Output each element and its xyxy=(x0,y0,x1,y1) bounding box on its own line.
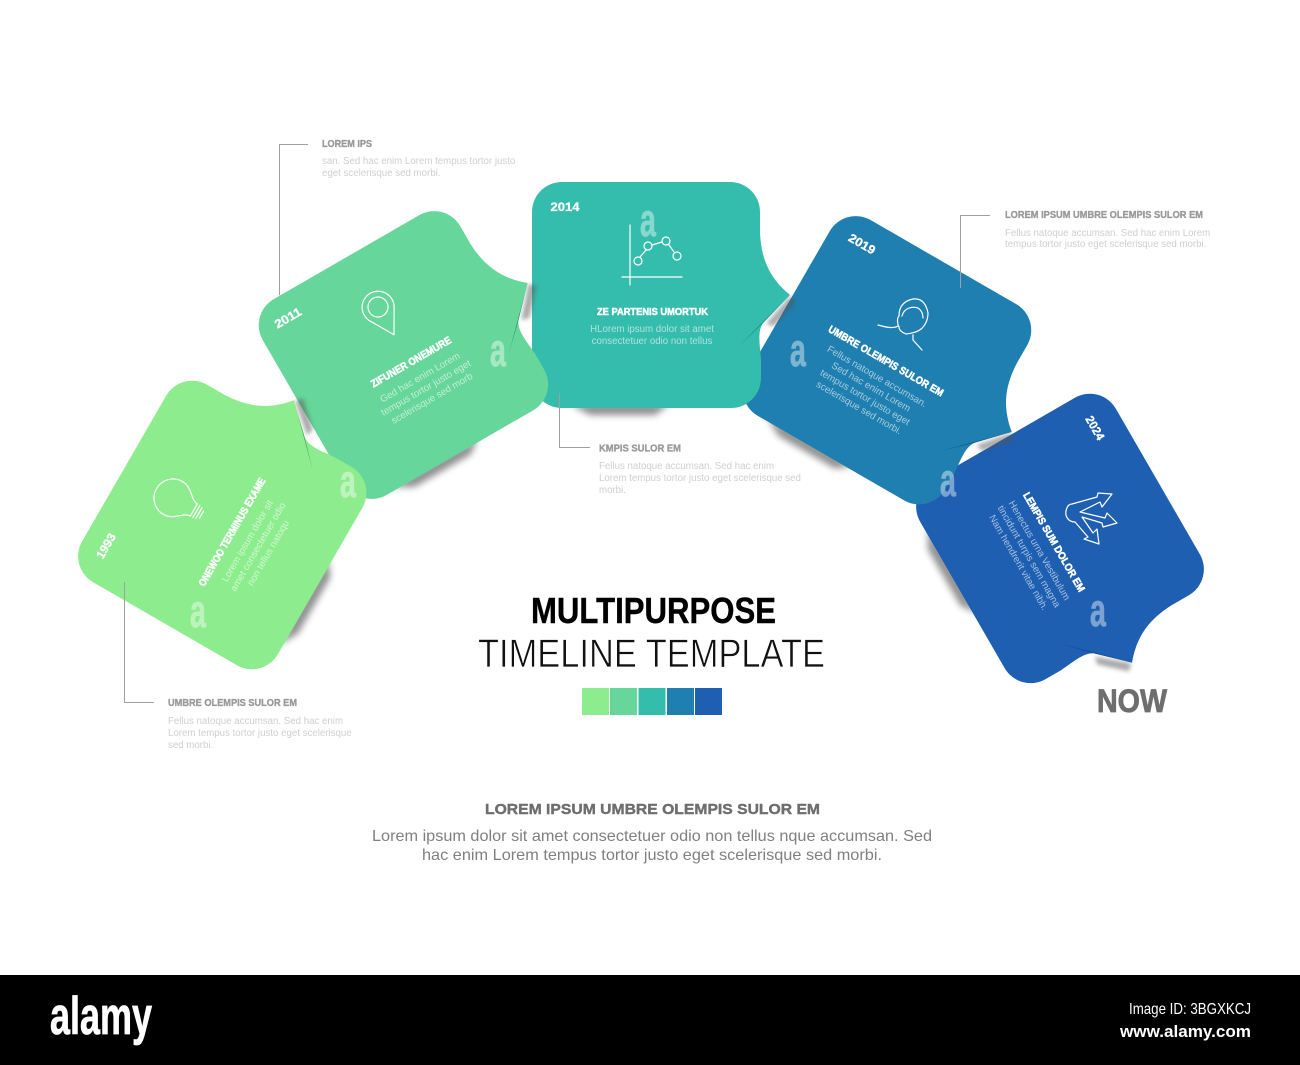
watermark letters: a xyxy=(340,456,356,508)
footer bar: Image ID: 3BGXKCJ xyxy=(1129,1001,1251,1018)
callout: 2014: KMPIS SULOR EM xyxy=(599,444,681,454)
callout: 2019 xyxy=(960,210,1210,288)
watermark letters: a xyxy=(190,586,206,638)
title: MULTIPURPOSE xyxy=(531,590,776,631)
footer bar: www.alamy.com xyxy=(1119,1022,1251,1041)
icon: line chart xyxy=(622,225,682,285)
watermark letters: a xyxy=(940,455,956,507)
footer bar xyxy=(0,975,1300,1065)
card text 2014: consectetuer odio non tellus xyxy=(592,336,712,347)
callout: 1993 xyxy=(124,582,352,751)
card text 2019: tempus tortor justo eget xyxy=(818,368,912,428)
panel: 2024 card xyxy=(899,383,1233,728)
bottom text block: LOREM IPSUM UMBRE OLEMPIS SULOR EM xyxy=(485,801,820,818)
card text 2019: UMBRE OLEMPIS SULOR EM xyxy=(826,323,946,399)
callout: 2011: LOREM IPS xyxy=(322,139,372,150)
card text 2011: tempus tortor justo eget xyxy=(379,358,473,419)
callout: 2014: morbi. xyxy=(599,485,626,496)
icon: map pin xyxy=(356,285,408,343)
callout: 2014: Fellus natoque accumsan. Sed hac enim xyxy=(599,461,774,472)
callout: 2019: LOREM IPSUM UMBRE OLEMPIS SULOR EM xyxy=(1005,210,1203,221)
year 2024: 2024 xyxy=(1082,413,1108,443)
callout: 2014 xyxy=(560,393,801,496)
card text 2024: Nam hendrerit vitae nibh. xyxy=(986,513,1050,612)
card text 2024: tincidunt turpis sem magna xyxy=(995,504,1062,610)
callout: 2019: Fellus natoque accumsan. Sed hac enim Lorem xyxy=(1005,228,1210,239)
card text 1993: amet consectetuer odio xyxy=(228,501,288,594)
title xyxy=(478,590,825,676)
card text 2011: Ged hac enim Lorem xyxy=(378,351,462,405)
callout: 2014: Lorem tempus tortor justo eget scelerisque sed xyxy=(599,473,801,484)
year 2011: 2011 xyxy=(272,305,304,331)
card text 2024 xyxy=(984,489,1088,616)
year 2014: 2014 xyxy=(550,200,580,214)
card text 2011: ZIFUNER ONEMURE xyxy=(369,334,454,390)
card text 2014: ZE PARTENIS UMORTUK xyxy=(597,306,708,318)
watermark letters xyxy=(190,195,1106,638)
card text 2019: scelerisque sed morbi. xyxy=(814,379,903,437)
card text 1993: ONEWOO TERMINUS EXAME xyxy=(196,476,268,589)
panel: 1993 card xyxy=(67,339,401,684)
watermark letters: a xyxy=(790,325,806,377)
card text 2011: scelerisque sed morb xyxy=(390,371,475,427)
bottom text block: hac enim Lorem tempus tortor justo eget scelerisque sed morbi. xyxy=(422,847,882,864)
watermark letters: a xyxy=(640,195,656,247)
card text 2024: LEMPIS SUM DOLOR EM xyxy=(1020,490,1087,594)
callout: 1993: Fellus natoque accumsan. Sed hac enim xyxy=(168,716,343,727)
callout: 2019: tempus tortor justo eget scelerisque sed morbi. xyxy=(1005,239,1206,250)
card text 2014 xyxy=(590,306,714,347)
bottom text block xyxy=(372,801,932,864)
card text 2011 xyxy=(364,332,479,429)
card text 2014: HLorem ipsum dolor sit amet xyxy=(590,324,714,335)
card text 1993: Lorem ipsum dolor sit xyxy=(220,498,276,584)
watermark letters: a xyxy=(490,325,506,377)
card text 2019 xyxy=(799,323,946,446)
label: NOW: NOW xyxy=(1097,683,1168,719)
colour swatches xyxy=(582,688,722,715)
card text 1993 xyxy=(196,476,304,609)
callout: 2011: san. Sed hac enim Lorem tempus tortor justo xyxy=(322,156,515,167)
watermark letters: a xyxy=(1090,585,1106,637)
callout: 2011 xyxy=(280,139,515,295)
footer bar: alamy xyxy=(50,987,152,1046)
card text 2024: Henectus urna Vestibulum xyxy=(1006,499,1072,602)
callout: 1993: Lorem tempus tortor justo eget scelerisque xyxy=(168,728,352,739)
callout: 2011: eget scelerisque sed morbi. xyxy=(322,168,440,179)
panel: 2011 card xyxy=(248,182,593,516)
callout: 1993: UMBRE OLEMPIS SULOR EM xyxy=(168,698,297,709)
year 2019: 2019 xyxy=(846,231,878,257)
icon: arrows xyxy=(1066,493,1117,544)
icon: person xyxy=(878,299,928,350)
panel: 2014 card xyxy=(532,182,796,415)
panel: 2019 card xyxy=(728,205,1073,539)
icon: light bulb xyxy=(147,472,211,531)
card text 2019: Fellus natoque accumsan. xyxy=(825,344,928,410)
bottom text block: Lorem ipsum dolor sit amet consectetuer odio non tellus nque accumsan. Sed xyxy=(372,828,932,845)
callout: 1993: sed morbi. xyxy=(168,740,213,751)
card text 1993: non tellus natoqu xyxy=(246,519,292,588)
year 1993: 1993 xyxy=(93,531,119,561)
title: TIMELINE TEMPLATE xyxy=(478,632,825,676)
card text 2019: Sed hac enim Lorem xyxy=(829,360,912,415)
